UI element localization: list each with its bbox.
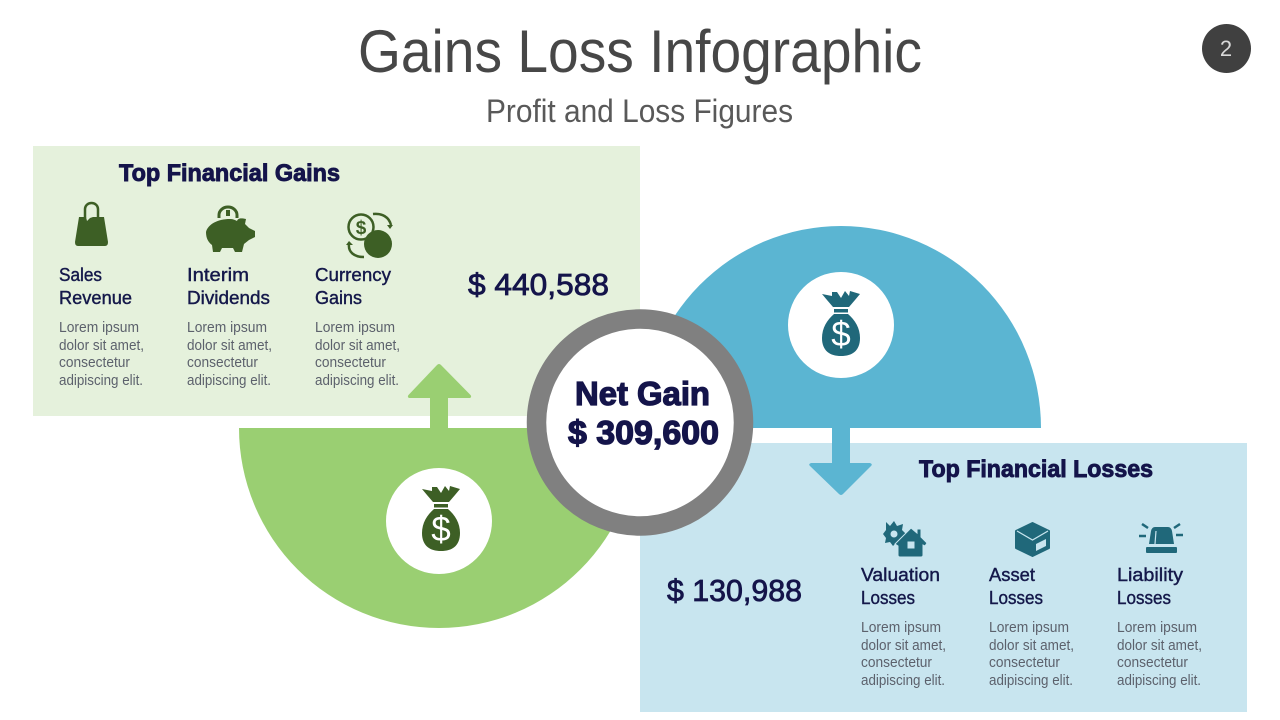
text: liability losses xyxy=(1117,564,1202,689)
text: asset losses: consectetur xyxy=(989,655,1060,671)
text: sales revenue: adipiscing elit. xyxy=(59,373,143,389)
text: asset losses: Losses xyxy=(989,587,1043,608)
arrow: up to gains xyxy=(408,364,471,429)
text: asset losses: Asset xyxy=(989,564,1035,585)
text: liability losses: Lorem ipsum xyxy=(1117,620,1197,636)
total gains amount: $ 440,588 xyxy=(468,267,609,302)
text: liability losses: adipiscing elit. xyxy=(1117,673,1201,689)
text: interim dividends: consectetur xyxy=(187,355,258,371)
text: interim dividends: Dividends xyxy=(187,287,270,308)
text: interim dividends xyxy=(187,264,272,389)
page number badge xyxy=(1202,24,1251,73)
text: interim dividends: Lorem ipsum xyxy=(187,320,267,336)
text: liability losses: Losses xyxy=(1117,587,1171,608)
text: currency gains: Gains xyxy=(315,287,362,308)
text: sales revenue: Sales xyxy=(59,264,102,285)
total losses amount: $ 130,988 xyxy=(667,573,802,608)
icon: blue money bag xyxy=(788,272,894,378)
net gain circle: Net Gain xyxy=(575,375,710,412)
text: currency gains xyxy=(315,264,400,389)
text: valuation losses: adipiscing elit. xyxy=(861,673,945,689)
icon: blue money bag: $ xyxy=(831,315,851,354)
text: currency gains: consectetur xyxy=(315,355,386,371)
text: sales revenue: consectetur xyxy=(59,355,130,371)
page number badge: 2 xyxy=(1220,36,1232,61)
text: sales revenue: dolor sit amet, xyxy=(59,338,144,354)
text: currency gains: adipiscing elit. xyxy=(315,373,399,389)
text: valuation losses xyxy=(861,564,946,689)
icon: piggy bank xyxy=(206,207,255,252)
icon: valuation house with gear xyxy=(883,521,927,557)
icon: green money bag: $ xyxy=(431,510,451,549)
icon: shopping bag xyxy=(75,203,108,246)
panel: top financial losses background xyxy=(640,443,1247,712)
text: sales revenue: Revenue xyxy=(59,287,132,308)
text: currency gains: dolor sit amet, xyxy=(315,338,400,354)
title: Gains Loss Infographic xyxy=(358,18,922,85)
text: valuation losses: dolor sit amet, xyxy=(861,638,946,654)
text: interim dividends: adipiscing elit. xyxy=(187,373,271,389)
text: liability losses: consectetur xyxy=(1117,655,1188,671)
icon: liability siren xyxy=(1139,524,1183,553)
text: currency gains: Currency xyxy=(315,264,392,285)
heading: top financial losses: Top Financial Losses xyxy=(919,456,1153,483)
text: asset losses: dolor sit amet, xyxy=(989,638,1074,654)
blue half circle xyxy=(641,226,1041,428)
text: sales revenue xyxy=(59,264,144,389)
net gain circle: $ 309,600 xyxy=(568,414,719,451)
subtitle: Profit and Loss Figures xyxy=(486,93,793,129)
text: currency gains: Lorem ipsum xyxy=(315,320,395,336)
icon: currency exchange xyxy=(346,214,393,258)
icon: green money bag xyxy=(386,468,492,574)
text: valuation losses: consectetur xyxy=(861,655,932,671)
text: valuation losses: Lorem ipsum xyxy=(861,620,941,636)
arrow: down to losses xyxy=(809,427,872,495)
icon: currency exchange: $ xyxy=(356,218,367,239)
text: valuation losses: Losses xyxy=(861,587,915,608)
heading: top financial gains: Top Financial Gains xyxy=(119,160,340,187)
text: asset losses: Lorem ipsum xyxy=(989,620,1069,636)
text: liability losses: Liability xyxy=(1117,564,1184,585)
text: valuation losses: Valuation xyxy=(861,564,940,585)
text: interim dividends: dolor sit amet, xyxy=(187,338,272,354)
text: asset losses xyxy=(989,564,1074,689)
text: sales revenue: Lorem ipsum xyxy=(59,320,139,336)
text: interim dividends: Interim xyxy=(187,264,249,285)
panel: top financial gains background xyxy=(33,146,640,416)
green half circle xyxy=(239,428,639,628)
net gain circle xyxy=(536,319,744,526)
text: liability losses: dolor sit amet, xyxy=(1117,638,1202,654)
icon: asset box xyxy=(1016,523,1049,556)
text: asset losses: adipiscing elit. xyxy=(989,673,1073,689)
